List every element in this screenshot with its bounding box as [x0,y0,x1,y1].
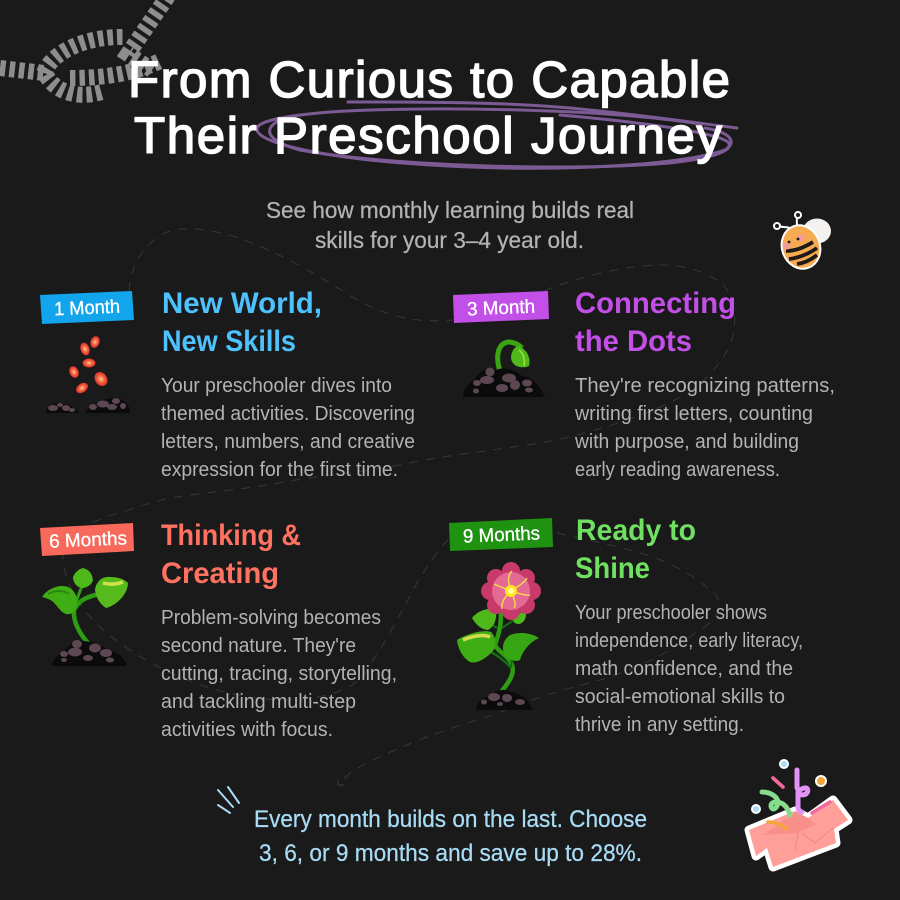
dashed journey path with arrow [63,229,735,785]
body text: and tackling multi-step [161,691,356,713]
heading: New World, New Skills [162,287,322,358]
body text: thrive in any setting. [575,714,744,736]
panel: 1 month [40,287,415,481]
body text: writing first letters, counting [574,403,813,425]
icon: young plant [42,568,128,666]
panel: 3 month [453,287,835,481]
heading: Connecting the Dots: Connecting [575,287,736,320]
body text: expression for the first time. [161,459,398,481]
closing message: 3, 6, or 9 months and save up to 28%. [259,840,642,867]
tag: 9 Months [449,518,553,551]
body text [161,375,415,481]
heading: New World, New Skills: New World, [162,287,322,320]
tag: 6 Months [40,523,134,556]
body text [161,607,397,741]
title [128,51,730,164]
tag: 1 Month [40,291,134,324]
heading: Connecting the Dots [575,287,736,358]
tag: 9 Months: 9 Months [463,523,540,548]
heading: New World, New Skills: New Skills [162,325,296,358]
decorative rope knot [0,0,168,95]
closing message: Every month builds on the last. Choose [254,806,647,833]
panel: 9 months [449,514,803,736]
icon: flowering plant [457,562,541,710]
body text [575,602,803,736]
title: From Curious to Capable [128,51,730,108]
heading: Ready to Shine [575,514,696,585]
closing message [254,806,647,867]
title: Their Preschool Journey [134,107,722,164]
scribble highlight around Preschool Journey [257,102,737,168]
tag: 6 Months: 6 Months [49,528,127,553]
heading: Connecting the Dots: the Dots [575,325,692,358]
icon: gift box with confetti [749,760,848,867]
heading: Ready to Shine: Ready to [576,514,696,547]
tag: 3 Month: 3 Month [467,297,535,320]
subtitle: See how monthly learning builds real [266,197,634,223]
body text: activities with focus. [161,719,333,741]
body text: independence, early literacy, [575,630,803,652]
tag: 3 Month [453,291,549,323]
icon: sprout [463,342,545,397]
panel: 6 months [40,519,397,741]
body text: math confidence, and the [575,658,793,680]
body text: letters, numbers, and creative [161,431,415,453]
heading: Thinking & Creating: Thinking & [161,519,301,552]
subtitle [266,197,634,253]
icon: seeds and soil [46,335,130,413]
icon: bee [774,212,831,274]
body text: Your preschooler dives into [161,375,392,397]
body text: Problem-solving becomes [161,607,381,629]
tag: 1 Month: 1 Month [54,297,120,320]
heading: Thinking & Creating: Creating [161,557,279,590]
body text: early reading awareness. [575,459,780,481]
body text: with purpose, and building [574,431,799,453]
icon: spark lines [218,787,239,813]
heading: Thinking & Creating [161,519,301,590]
body text: themed activities. Discovering [161,403,415,425]
body text: cutting, tracing, storytelling, [161,663,397,685]
body text [574,375,835,481]
body text: Your preschooler shows [575,602,767,624]
subtitle: skills for your 3–4 year old. [315,227,584,253]
body text: second nature. They're [161,635,356,657]
body text: They're recognizing patterns, [575,375,835,397]
heading: Ready to Shine: Shine [575,552,650,585]
body text: social-emotional skills to [575,686,785,708]
